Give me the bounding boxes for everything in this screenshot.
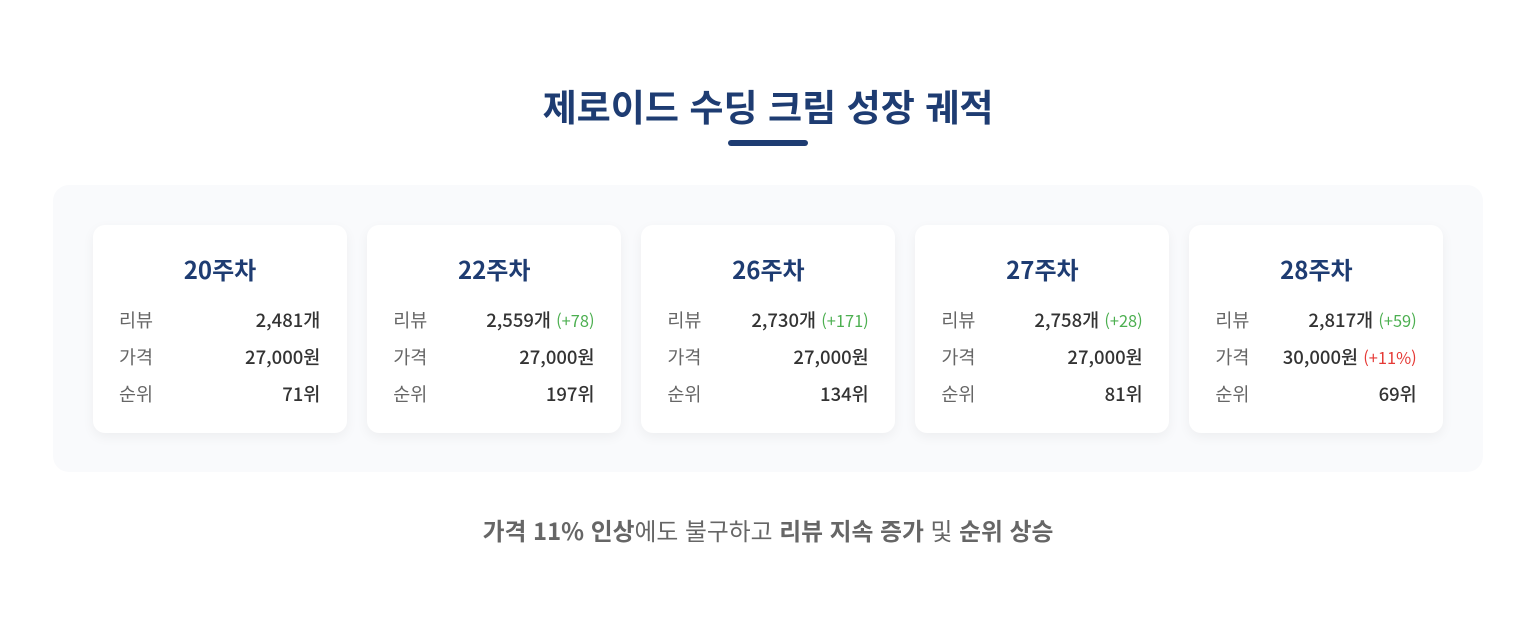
review row: 2,559개 (+78): [486, 307, 594, 333]
price row: 가격: [941, 344, 975, 370]
review row: [941, 307, 1143, 333]
review row: [119, 307, 320, 333]
review row: 2,730개 (+171): [751, 307, 869, 333]
review row: 2,758개 (+28): [1034, 307, 1143, 333]
review row: 리뷰: [119, 307, 153, 333]
rank row: [667, 381, 869, 407]
review row: 리뷰: [667, 307, 701, 333]
summary note: 가격 11% 인상에도 불구하고 리뷰 지속 증가 및 순위 상승: [483, 512, 1053, 547]
week heading: 20주차: [184, 251, 256, 286]
review row: 2,817개 (+59): [1308, 307, 1417, 333]
rank row: 순위: [393, 381, 427, 407]
price row: 27,000원: [793, 344, 869, 370]
card: week 22: [367, 225, 621, 433]
price row: 27,000원: [1067, 344, 1143, 370]
review row: 리뷰: [393, 307, 427, 333]
review row: [393, 307, 594, 333]
price row: [1215, 344, 1417, 370]
rank row: 69위: [1379, 381, 1417, 407]
price row: 27,000원: [245, 344, 320, 370]
price row: [393, 344, 594, 370]
week heading: 22주차: [458, 251, 530, 286]
panel: weekly cards: [53, 185, 1483, 472]
rank row: 197위: [546, 381, 594, 407]
card: week 27: [915, 225, 1169, 433]
rank row: 81위: [1105, 381, 1143, 407]
week heading: 26주차: [732, 251, 805, 286]
week heading: 27주차: [1006, 251, 1079, 286]
price row: 가격: [667, 344, 701, 370]
rank row: 순위: [941, 381, 975, 407]
rank row: 순위: [1215, 381, 1249, 407]
card: week 28: [1189, 225, 1443, 433]
price row: [119, 344, 320, 370]
review row: 리뷰: [1215, 307, 1249, 333]
price row: 가격: [393, 344, 427, 370]
title: 제로이드 수딩 크림 성장 궤적: [543, 78, 993, 132]
rank row: [1215, 381, 1417, 407]
price row: [941, 344, 1143, 370]
review row: 2,481개: [256, 307, 320, 333]
review row: [1215, 307, 1417, 333]
card: week 26: [641, 225, 895, 433]
rank row: [119, 381, 320, 407]
rank row: 71위: [282, 381, 320, 407]
review row: [667, 307, 869, 333]
price row: 가격: [1215, 344, 1249, 370]
week heading: 28주차: [1280, 251, 1353, 286]
title underline: [728, 140, 808, 146]
review row: 리뷰: [941, 307, 975, 333]
card: week 20: [93, 225, 347, 433]
rank row: 순위: [667, 381, 701, 407]
rank row: 순위: [119, 381, 153, 407]
rank row: [393, 381, 594, 407]
rank row: 134위: [820, 381, 869, 407]
price row: 30,000원 (+11%): [1283, 344, 1417, 370]
price row: [667, 344, 869, 370]
price row: 27,000원: [519, 344, 594, 370]
rank row: [941, 381, 1143, 407]
price row: 가격: [119, 344, 153, 370]
